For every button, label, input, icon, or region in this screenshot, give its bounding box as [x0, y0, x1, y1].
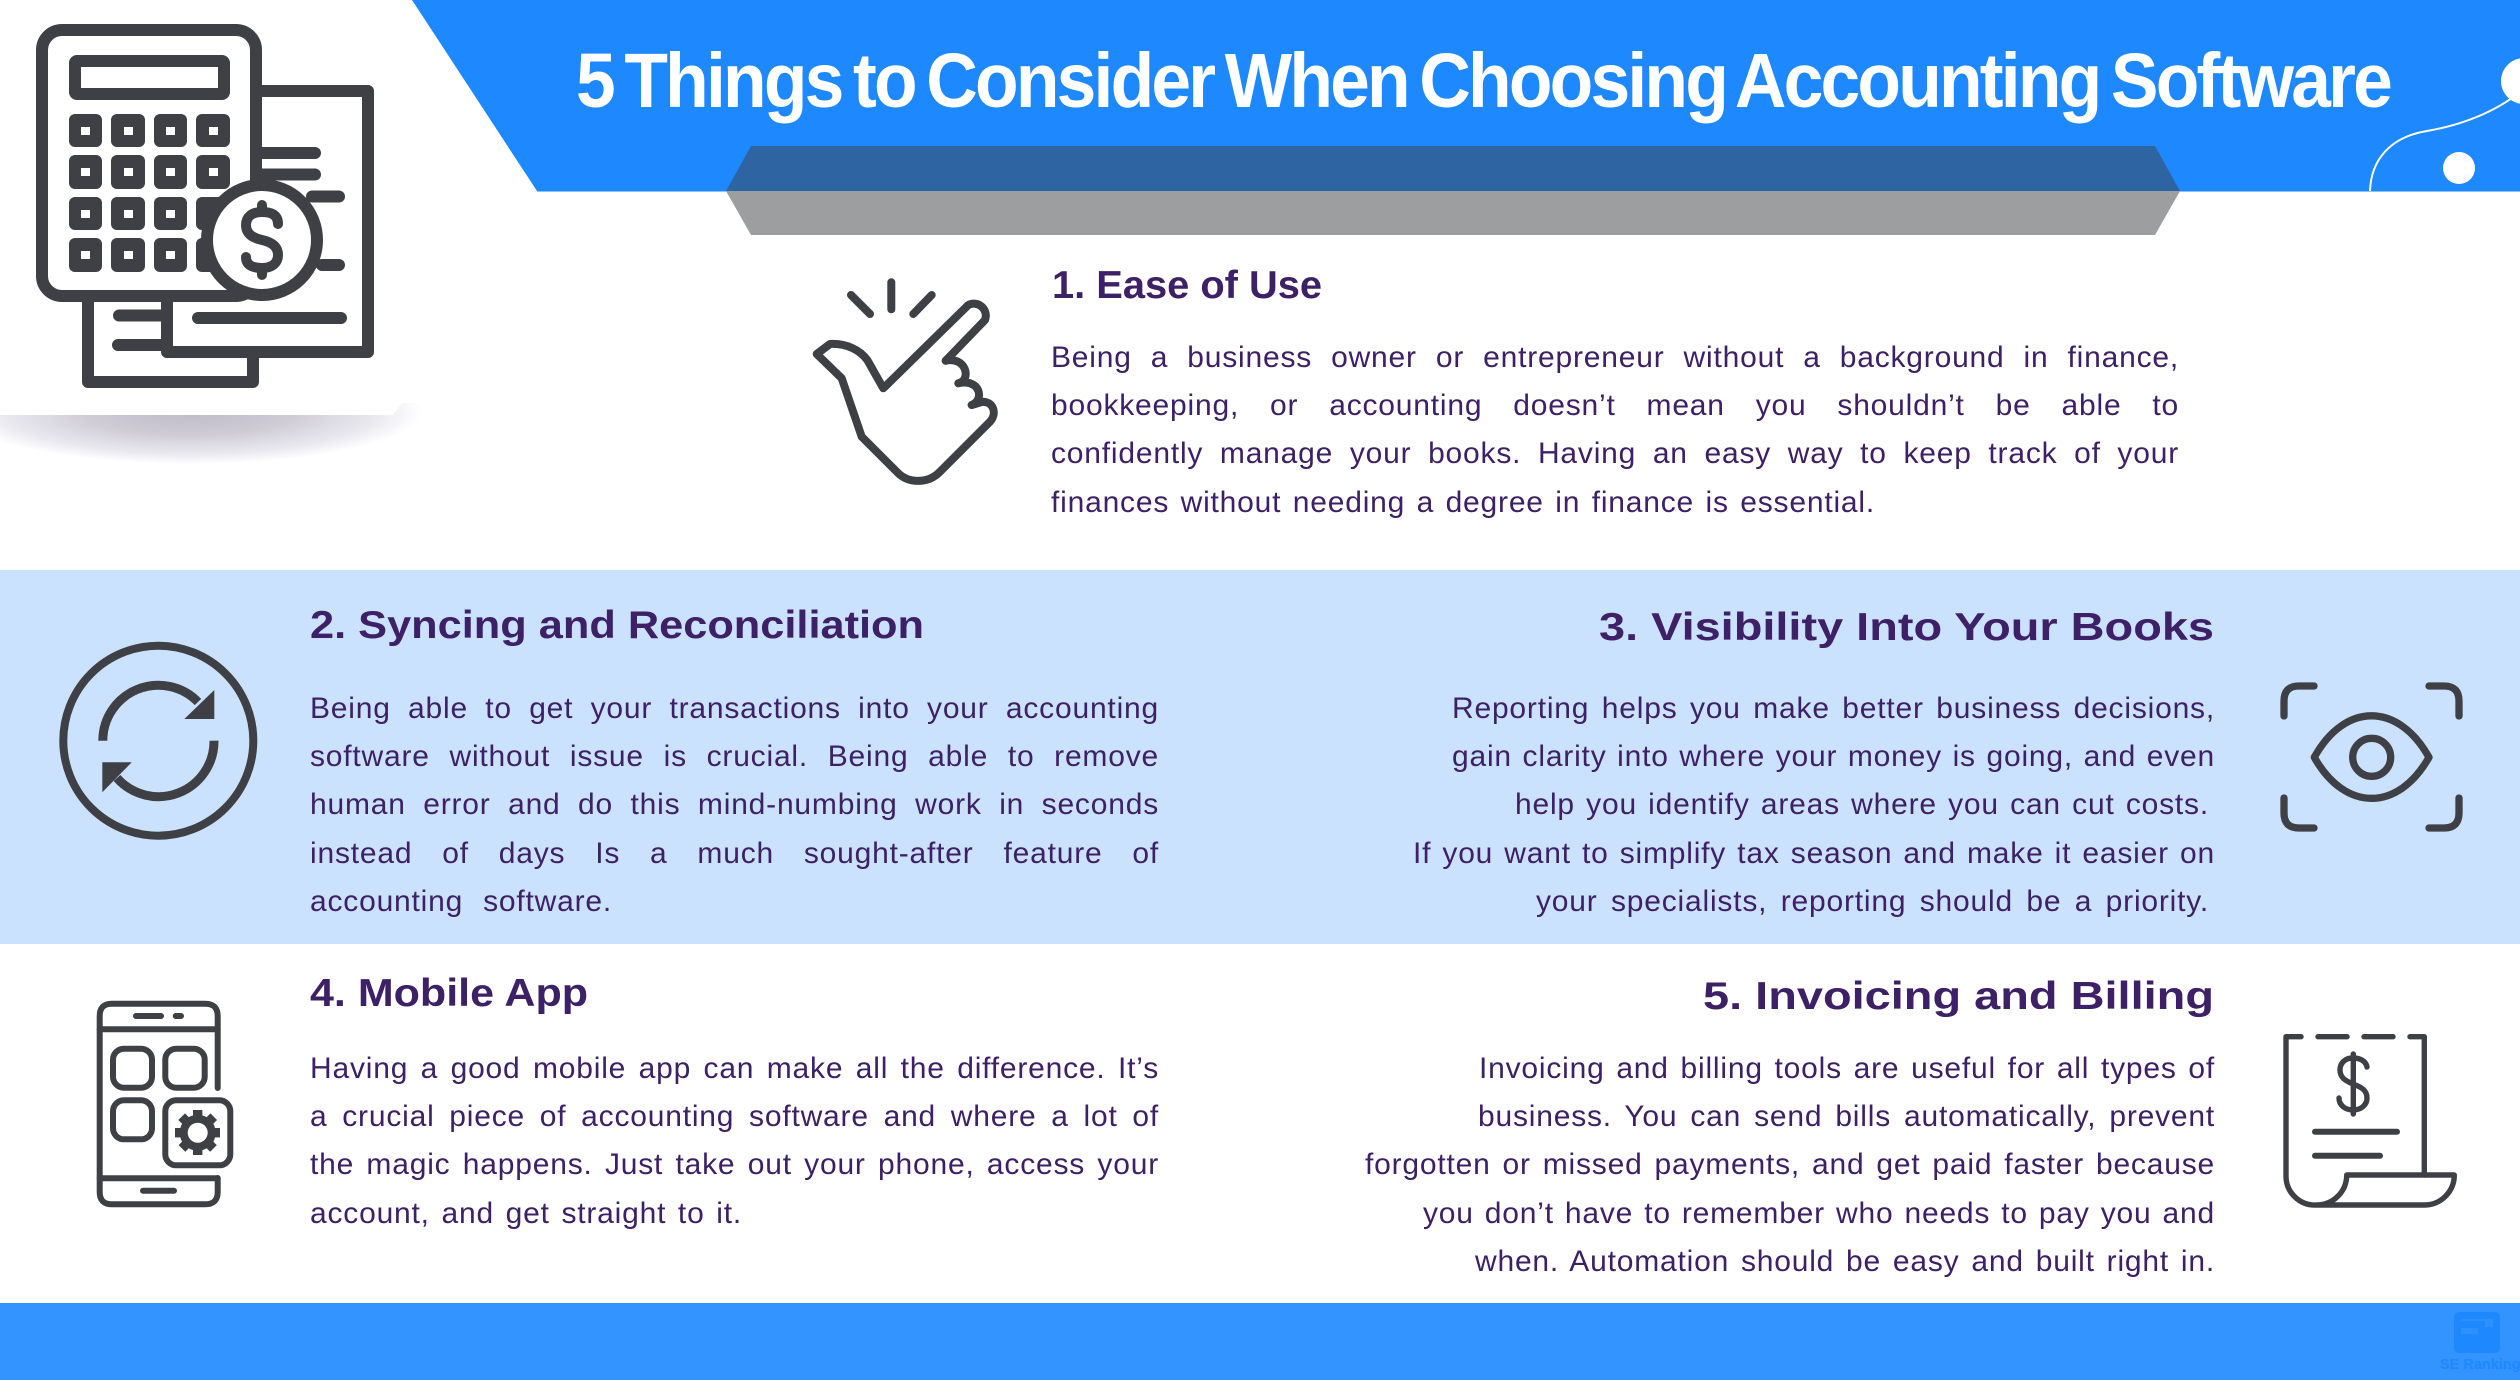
panel: 3. Visibility Into Your Books [1413, 606, 2463, 918]
text block: the magic happens. Just take out your phone, access your [310, 1148, 1159, 1181]
text block: your specialists, reporting should be a priority. [1536, 885, 2209, 918]
text block: instead of days Is a much sought-after feature of [310, 837, 1159, 870]
ribbon grey part [726, 191, 2180, 235]
heading: 5. Invoicing and Billing [1703, 975, 2214, 1018]
text block: accounting software. [310, 885, 612, 918]
text block: If you want to simplify tax season and make it easier on [1413, 837, 2215, 870]
icon: paper bill with dollar [2283, 1034, 2457, 1208]
panel: 2. Syncing and Reconciliation [59, 604, 1159, 918]
text block [1413, 692, 2215, 918]
text block: a crucial piece of accounting software and where a lot of [310, 1100, 1159, 1133]
footer band [0, 1303, 2520, 1380]
text block: help you identify areas where you can cut costs. [1515, 788, 2209, 821]
logo mark [2454, 1312, 2500, 1353]
heading: 3. Visibility Into Your Books [1599, 606, 2214, 649]
text block: forgotten or missed payments, and get paid faster because [1365, 1148, 2215, 1181]
text block: you don’t have to remember who needs to pay you and [1423, 1197, 2215, 1230]
panel: 5. Invoicing and Billing [1365, 975, 2457, 1278]
text block: software without issue is crucial. Being able to remove [310, 740, 1159, 773]
panel: 4. Mobile App [96, 972, 1159, 1230]
text block: bookkeeping, or accounting doesn’t mean you shouldn’t be able to [1051, 389, 2179, 422]
text block [1051, 341, 2179, 519]
text block: Invoicing and billing tools are useful for all types of [1479, 1052, 2215, 1085]
heading: 4. Mobile App [310, 972, 588, 1015]
decorative circles and curve [2370, 58, 2520, 191]
text block [310, 1052, 1159, 1230]
panel: 1. Ease of Use [812, 264, 2179, 519]
text block: business. You can send bills automatically, prevent [1478, 1100, 2215, 1133]
text block [1365, 1052, 2215, 1278]
heading: 1. Ease of Use [1052, 264, 1322, 307]
text block: Having a good mobile app can make all the difference. It’s [310, 1052, 1159, 1085]
header banner [412, 0, 2520, 235]
text block: Being a business owner or entrepreneur without a background in finance, [1051, 341, 2179, 374]
text block [310, 692, 1159, 918]
text block: confidently manage your books. Having an easy way to keep track of your [1051, 437, 2179, 470]
icon: snapping fingers [812, 278, 998, 485]
watermark logo [2440, 1312, 2520, 1373]
light blue band [0, 570, 2520, 944]
banner bottom edge [537, 190, 2520, 192]
icon: eye in focus brackets [2280, 682, 2463, 832]
text block: human error and do this mind-numbing work in seconds [310, 788, 1159, 821]
ribbon dark part [726, 146, 2180, 191]
text block: gain clarity into where your money is going, and even [1452, 740, 2215, 773]
shadow under calculator [0, 404, 406, 460]
text block: account, and get straight to it. [310, 1197, 742, 1230]
text block: finances without needing a degree in finance is essential. [1051, 486, 1875, 519]
text block: Reporting helps you make better business decisions, [1452, 692, 2215, 725]
title: 5 Things to Consider When Choosing Accounting Software [576, 38, 2391, 124]
icon: phone with apps and gear [96, 1000, 234, 1208]
text block: when. Automation should be easy and built right in. [1475, 1245, 2215, 1278]
heading: 2. Syncing and Reconciliation [310, 604, 924, 647]
text block: Being able to get your transactions into your accounting [310, 692, 1159, 725]
logo text: SE Ranking [2440, 1357, 2520, 1373]
icon: calculator with invoice and dollar coin [36, 24, 374, 388]
banner shape [412, 0, 2520, 191]
icon: sync arrows in circle [59, 642, 258, 840]
